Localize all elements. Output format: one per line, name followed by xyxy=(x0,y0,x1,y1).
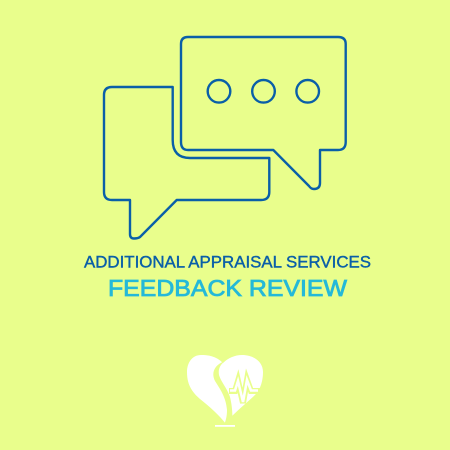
logo: heart with pulse xyxy=(187,355,263,427)
icon: speech bubbles xyxy=(104,37,346,238)
heading: feedback review: FEEDBACK REVIEW xyxy=(108,275,347,301)
right speech bubble xyxy=(181,37,346,189)
swoosh band xyxy=(213,361,232,425)
base line xyxy=(215,425,235,427)
pulse outline xyxy=(229,380,261,403)
left speech bubble xyxy=(104,87,269,238)
typing dots xyxy=(208,80,319,103)
heading: additional appraisal services: ADDITIONAL APPRAISAL SERVICES xyxy=(84,254,371,272)
pulse line xyxy=(230,380,258,402)
heart shape xyxy=(187,355,263,424)
